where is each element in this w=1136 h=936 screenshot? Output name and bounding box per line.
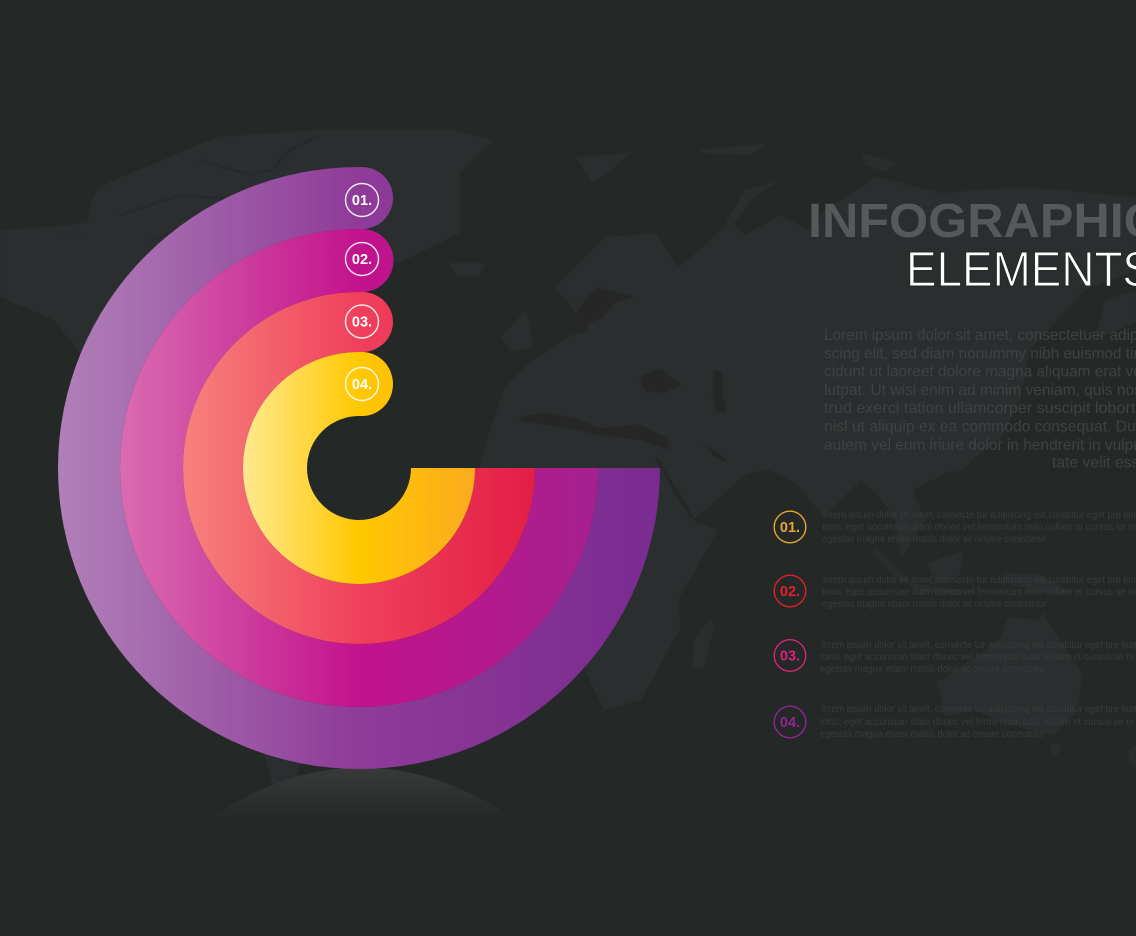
legend item 01: egestas magna etiam mattis dolor ac ornare conectetur <box>822 534 1048 545</box>
legend item 04: egestas magna etiam mattis dolor ac ornare conectetur <box>820 729 1046 740</box>
badge 01 <box>346 184 378 216</box>
legend item 02: 02. <box>780 584 800 600</box>
arc 01 purple <box>58 167 660 769</box>
badge 04 <box>346 368 378 400</box>
planet dome reflection <box>205 768 520 822</box>
world map <box>0 130 1136 813</box>
legend item 03 <box>774 640 1136 675</box>
title: INFOGRAPHIC <box>808 195 1136 248</box>
legend item 04: 04. <box>780 715 800 731</box>
arc 03 coral red <box>183 292 535 644</box>
title <box>808 195 1136 297</box>
legend item 03: egestas magna etiam mattis dolor ac ornare conectetur <box>820 664 1046 675</box>
arc 02 magenta <box>120 229 598 707</box>
badge 02: 02. <box>352 252 372 268</box>
arc 04 yellow <box>243 352 475 584</box>
intro text block <box>824 327 1136 472</box>
concentric arc chart <box>58 167 660 769</box>
legend item 01 <box>774 510 1136 545</box>
legend item 03: 03. <box>780 648 800 664</box>
legend item 01: 01. <box>780 520 800 536</box>
badge 02 <box>346 242 378 276</box>
legend item 04 <box>774 704 1136 740</box>
badge 03 <box>346 305 378 338</box>
badge 01: 01. <box>352 193 372 209</box>
legend item 02 <box>774 575 1136 610</box>
badge 03: 03. <box>352 314 372 330</box>
intro text block: trud exerci tation ullamcorper suscipit lobortis <box>824 400 1136 417</box>
badge 04: 04. <box>352 377 372 393</box>
legend item 02: egestas magna etiam mattis dolor ac ornare conectetur <box>822 599 1048 610</box>
